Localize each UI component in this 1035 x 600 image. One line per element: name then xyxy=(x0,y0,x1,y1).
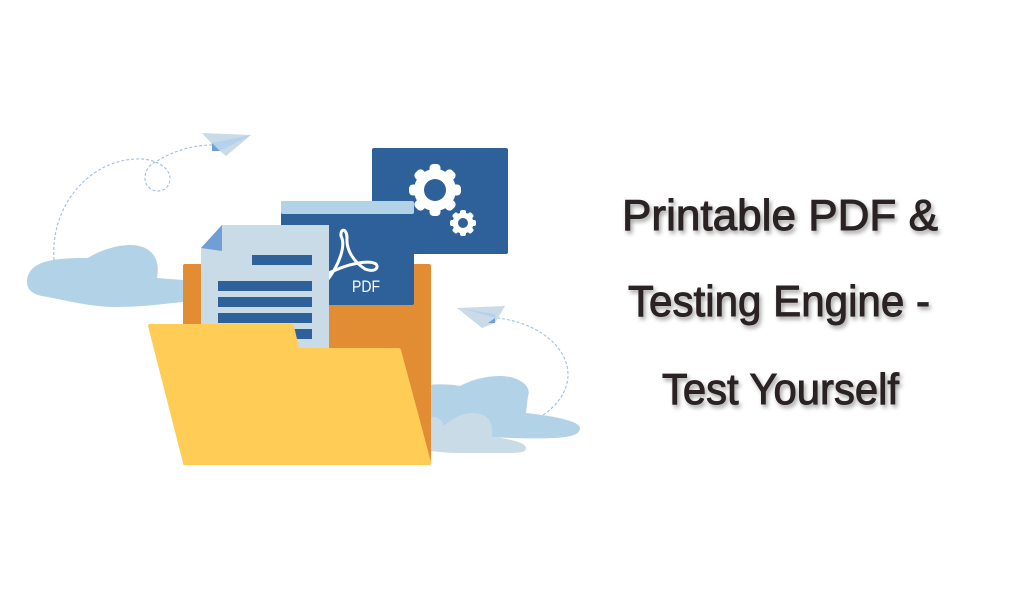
paper plane: upper xyxy=(202,133,251,156)
illustration: folder with documents xyxy=(27,133,580,465)
folder back xyxy=(183,264,431,465)
icon: PDF symbol xyxy=(325,230,377,283)
icon: large gear xyxy=(409,164,461,216)
left cloud xyxy=(27,245,190,307)
right cloud xyxy=(425,376,580,440)
title line 3: Test Yourself xyxy=(662,365,900,414)
dashed flight path: upper left xyxy=(54,145,212,260)
folder front xyxy=(148,324,431,465)
title line 2: Testing Engine - xyxy=(628,277,930,326)
icon: small gear xyxy=(450,210,476,236)
title line 1: Printable PDF & xyxy=(622,191,938,240)
settings panel xyxy=(372,148,508,254)
PDF panel xyxy=(281,201,414,305)
document corner fold xyxy=(201,225,222,251)
document xyxy=(201,225,329,352)
PDF label: PDF xyxy=(352,278,380,296)
dashed flight path: lower right xyxy=(497,318,568,415)
title xyxy=(622,191,938,414)
document text lines xyxy=(218,255,312,339)
paper plane: lower xyxy=(457,306,505,328)
small front cloud xyxy=(431,413,526,453)
